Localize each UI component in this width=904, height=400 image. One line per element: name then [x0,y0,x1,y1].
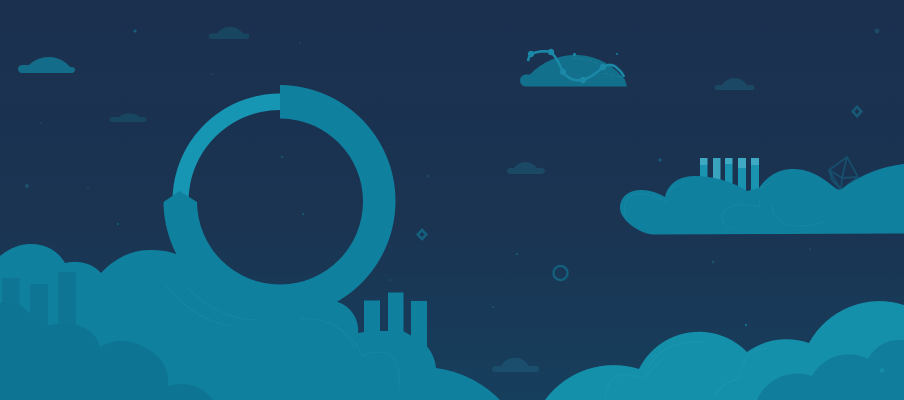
thick ring segment [164,85,395,317]
cloud body [620,164,904,234]
cloud body [520,55,627,86]
background specks [25,28,880,326]
bar chart: left cluster [2,272,76,334]
bar chart: five bars [700,158,759,204]
bottom right cloud details [605,342,767,400]
right floating cloud with bars [620,157,904,234]
bottom right back cloud [545,301,904,400]
small cloud: lower centre [492,358,539,372]
cloud outline details [625,183,825,229]
small cloud: centre [507,162,545,174]
icon: crystal wireframe [829,157,858,190]
bottom right front cloud [757,340,904,400]
main cloud detail lines [165,283,400,390]
icon: diamond right [851,105,863,118]
line chart [528,49,624,83]
donut chart [164,85,395,317]
cloud dashed details [573,58,625,80]
main cloud: bottom left front [0,303,213,400]
main cloud: bottom left back [0,244,500,400]
bar chart: right of main cloud [364,292,427,351]
cloud with line chart [520,49,627,86]
icon: ring [554,266,568,280]
small cloud: top left [18,57,75,73]
speck on front cloud [880,368,884,372]
icon: diamond left [416,228,428,241]
small cloud: left middle [110,113,146,122]
small cloud: upper right [715,78,755,90]
small cloud: top [209,27,249,39]
thin ring segment [172,94,280,201]
